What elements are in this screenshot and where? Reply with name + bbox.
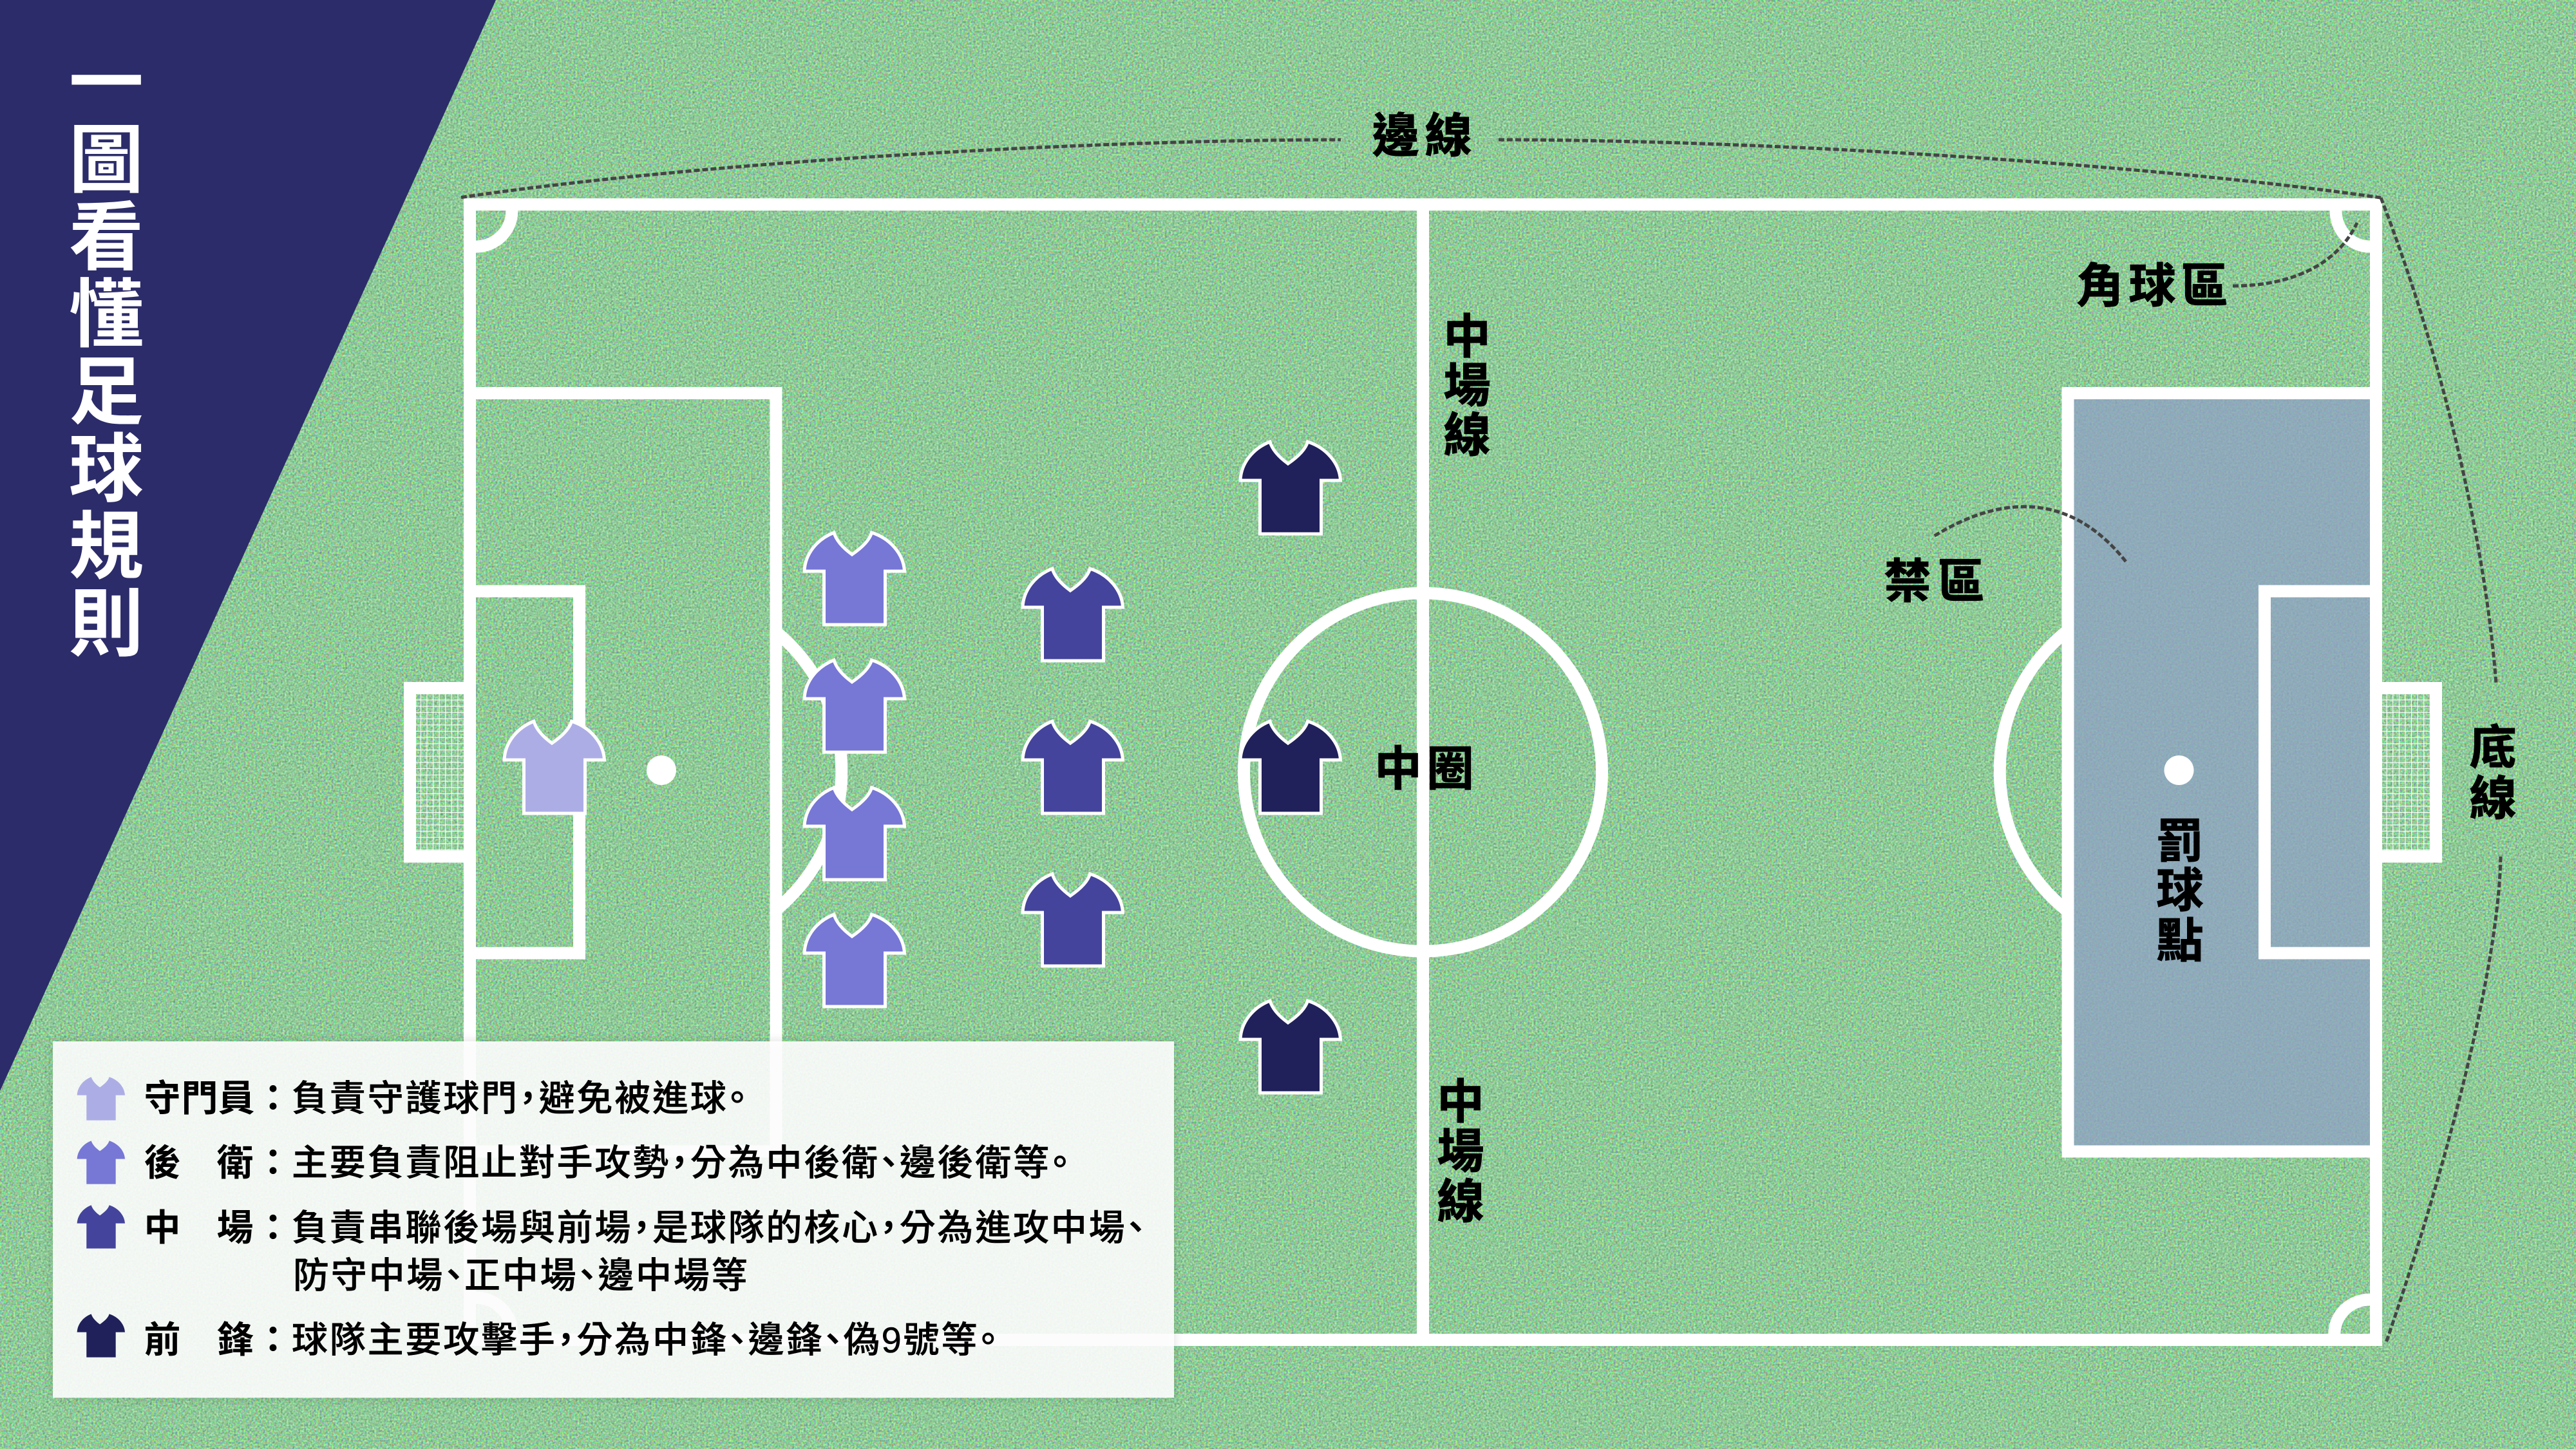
label: goal line: 底線: [2469, 722, 2517, 825]
label: penalty spot: 罰球點: [2156, 815, 2204, 967]
legend panel: [53, 1041, 1174, 1397]
right penalty box: [2068, 393, 2370, 1151]
left penalty spot: [647, 755, 676, 785]
legend row: goalkeeper: [77, 1077, 748, 1121]
title panel: [0, 0, 496, 1091]
dashed leader: sideline left: [461, 140, 1341, 197]
legend row: midfielder: 負責串聯後場與前場，是球隊的核心，分為進攻中場、: [292, 1208, 1146, 1248]
label: halfway line bottom: 中場線: [1437, 1076, 1484, 1228]
center circle: [1244, 593, 1602, 951]
legend row: goalkeeper: 守門員：: [144, 1078, 291, 1119]
legend row: forward: 前鋒：: [144, 1320, 291, 1361]
forward shirts: [1240, 442, 1341, 1093]
penalty area highlight: [2070, 396, 2373, 1148]
label: corner area: 角球區: [2076, 260, 2228, 312]
dashed leader: corner area: [2233, 223, 2357, 286]
label: sideline: 邊線: [1372, 110, 1472, 162]
goalkeeper shirt: [504, 721, 604, 813]
label: halfway line top: 中場線: [1444, 311, 1490, 462]
dashed leader: goal line lower: [2386, 857, 2501, 1343]
legend row: midfielder: 防守中場、正中場、邊中場等: [293, 1255, 749, 1296]
left goal box: [476, 591, 580, 953]
pitch outline: [470, 205, 2376, 1340]
legend row: midfielder: [77, 1205, 1146, 1296]
right penalty arc: [2000, 630, 2069, 912]
halfway line: [1417, 211, 1429, 1334]
title: 一圖看懂足球規則: [69, 41, 144, 666]
legend row: forward: [77, 1314, 999, 1361]
dashed leader: penalty area: [1935, 507, 2126, 562]
left penalty box: [476, 393, 776, 1151]
defender shirts: [804, 533, 904, 1007]
right goal: [2382, 688, 2436, 857]
football pitch lines: [410, 205, 2436, 1340]
left penalty arc: [776, 632, 842, 910]
left goal: [410, 688, 464, 857]
legend row: forward: 球隊主要攻擊手，分為中鋒、邊鋒、偽9號等。: [292, 1320, 999, 1360]
legend shadow: [53, 1041, 1174, 1398]
corner arcs: [476, 211, 2370, 1334]
right penalty spot: [2164, 755, 2193, 785]
legend row: defender: 後衛：: [144, 1142, 291, 1184]
right goal box: [2264, 591, 2370, 953]
dashed leader: sideline right: [1499, 140, 2381, 198]
legend row: midfielder: 中場：: [144, 1208, 291, 1249]
legend row: defender: 主要負責阻止對手攻勢，分為中後衛、邊後衛等。: [292, 1142, 1071, 1183]
dashed leader: goal line upper: [2381, 198, 2496, 684]
midfielder shirts: [1023, 569, 1123, 966]
legend row: goalkeeper: 負責守護球門，避免被進球。: [292, 1078, 748, 1119]
label: penalty area: 禁區: [1884, 556, 1985, 608]
label: center circle: 中圈: [1374, 743, 1473, 795]
